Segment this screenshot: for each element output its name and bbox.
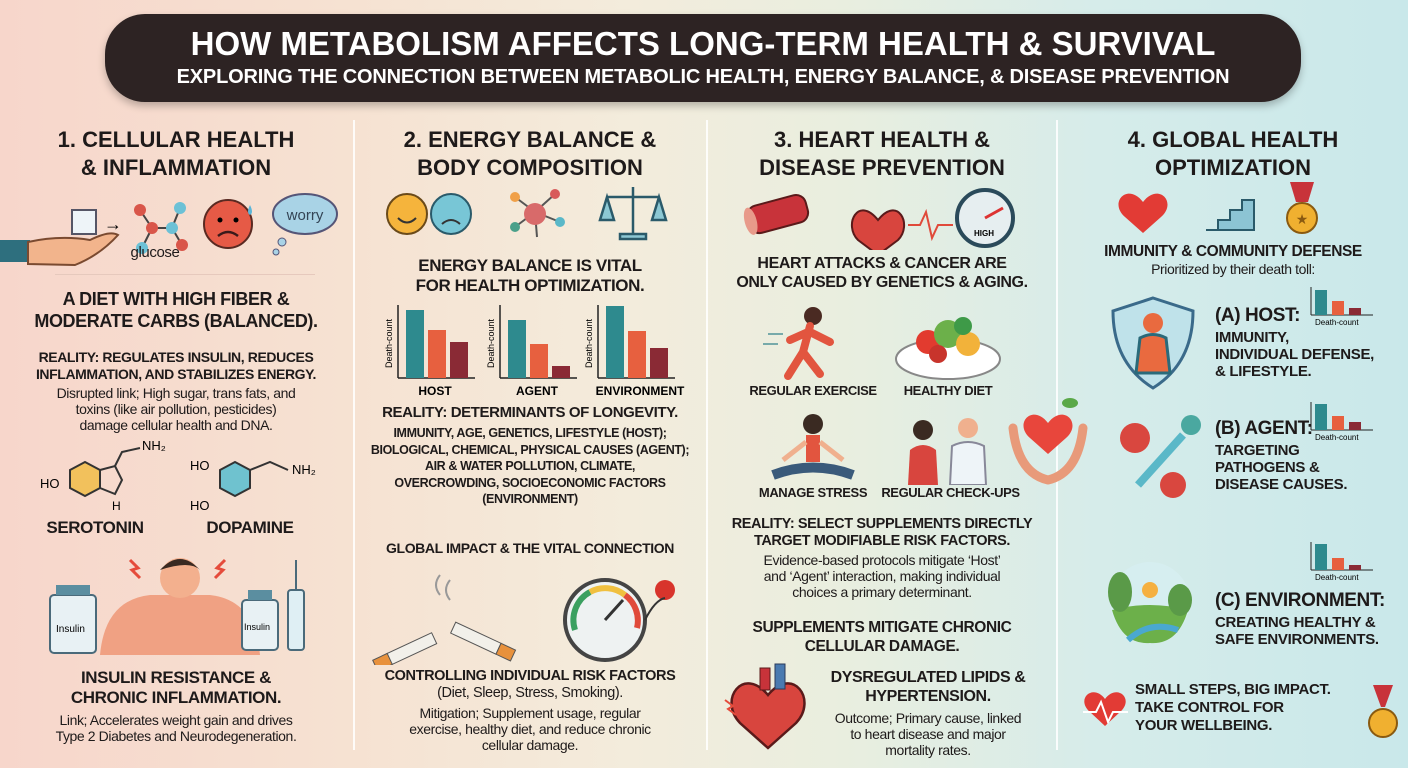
- molecules: HO: [40, 476, 60, 491]
- panel: heart health: [724, 127, 1088, 758]
- bar charts: ENVIRONMENT: [596, 384, 685, 398]
- item A: host: [1112, 287, 1374, 390]
- labels: serotonin dopamine: DOPAMINE: [206, 518, 294, 537]
- molecules: HO: [190, 458, 210, 473]
- molecules: [40, 440, 316, 513]
- link text: Link; Accelerates weight gain and drives: [59, 712, 293, 728]
- mitigation text: exercise, healthy diet, and reduce chronic: [409, 721, 651, 737]
- evidence text: choices a primary determinant.: [792, 584, 972, 600]
- reality: supplements: REALITY: SELECT SUPPLEMENTS DIRECTLY: [732, 516, 1032, 532]
- cigarette and gauge icons: [372, 574, 675, 665]
- item A: host: & LIFESTYLE.: [1215, 363, 1311, 380]
- icons row 4: [1118, 182, 1318, 234]
- heading 2: [404, 127, 656, 180]
- heading 2: BODY COMPOSITION: [417, 155, 643, 180]
- outcome text: mortality rates.: [885, 742, 971, 758]
- bar charts: Death-count: [384, 318, 394, 368]
- evidence text: [764, 552, 1000, 600]
- closing call to action: SMALL STEPS, BIG IMPACT.: [1135, 681, 1331, 698]
- insulin resistance heading: INSULIN RESISTANCE &: [81, 668, 271, 687]
- molecules: HO: [190, 498, 210, 513]
- reality: determinants: REALITY: DETERMINANTS OF LONGEVITY.: [382, 404, 678, 421]
- energy balance statement: ENERGY BALANCE IS VITAL: [418, 256, 642, 275]
- icons row 1: worry: [286, 207, 324, 224]
- immunity heading: IMMUNITY & COMMUNITY DEFENSE: [1104, 243, 1362, 260]
- bar charts: Death-count: [584, 318, 594, 368]
- item A: host: (A) HOST:: [1215, 305, 1300, 326]
- global impact heading: GLOBAL IMPACT & THE VITAL CONNECTION: [386, 540, 674, 556]
- myth statement: HEART ATTACKS & CANCER ARE: [757, 255, 1007, 272]
- labels: serotonin dopamine: [46, 518, 294, 537]
- closing call to action: TAKE CONTROL FOR: [1135, 699, 1284, 716]
- bar charts: HOST: [418, 384, 452, 398]
- item A: host: Death-count: [1315, 318, 1359, 327]
- heading 3: DISEASE PREVENTION: [759, 155, 1005, 180]
- reality text: INFLAMMATION, AND STABILIZES ENERGY.: [36, 366, 316, 382]
- icons row 1: [0, 193, 338, 266]
- supplements heading: [753, 619, 1012, 655]
- panel: energy balance: [371, 127, 689, 753]
- bar charts: Death-count: [486, 318, 496, 368]
- icons row 1: →: [104, 214, 122, 234]
- icon: healthy diet: [895, 317, 1001, 398]
- icon: regular exercise: [749, 307, 877, 398]
- labels: serotonin dopamine: SEROTONIN: [46, 518, 144, 537]
- heading 4: 4. GLOBAL HEALTH: [1128, 127, 1338, 152]
- item C: environment: Death-count: [1315, 573, 1359, 582]
- heading 4: [1128, 127, 1338, 180]
- outcome text: to heart disease and major: [850, 726, 1006, 742]
- item B: agent: Death-count: [1315, 433, 1359, 442]
- icon: manage stress: MANAGE STRESS: [759, 485, 867, 500]
- heading 4: OPTIMIZATION: [1155, 155, 1311, 180]
- prioritized text: Prioritized by their death toll:: [1151, 261, 1315, 277]
- label: glucose: glucose: [131, 244, 179, 261]
- icon: manage stress: [759, 414, 868, 500]
- lipids heading: [831, 669, 1026, 705]
- man and insulin vials: [49, 558, 305, 655]
- reality: supplements: [732, 516, 1032, 549]
- lipids heading: DYSREGULATED LIPIDS &: [831, 669, 1025, 686]
- supplements heading: SUPPLEMENTS MITIGATE CHRONIC: [753, 619, 1011, 636]
- man and insulin vials: Insulin: [244, 622, 270, 632]
- molecules: NH₂: [292, 462, 316, 477]
- determinants list: BIOLOGICAL, CHEMICAL, PHYSICAL CAUSES (AGENT);: [371, 442, 689, 456]
- energy balance statement: FOR HEALTH OPTIMIZATION.: [416, 276, 644, 295]
- controlling risk factors: CONTROLLING INDIVIDUAL RISK FACTORS: [385, 668, 675, 684]
- controlling risk factors: [385, 668, 676, 701]
- body text: [57, 385, 295, 433]
- icons row 3: [744, 188, 1015, 250]
- heading 1: [58, 127, 294, 180]
- heading 3: [759, 127, 1005, 180]
- heading 1: 1. CELLULAR HEALTH: [58, 127, 294, 152]
- title: HOW METABOLISM AFFECTS LONG-TERM HEALTH & SURVIVAL: [191, 25, 1215, 62]
- link text: Type 2 Diabetes and Neurodegeneration.: [56, 728, 296, 744]
- item B: agent: PATHOGENS &: [1215, 459, 1319, 476]
- determinants list: [371, 426, 689, 506]
- icons row 3: HIGH: [974, 229, 994, 238]
- insulin resistance heading: CHRONIC INFLAMMATION.: [71, 688, 281, 707]
- determinants list: OVERCROWDING, SOCIOECONOMIC FACTORS: [394, 476, 666, 490]
- man and insulin vials: Insulin: [56, 624, 85, 635]
- determinants list: AIR & WATER POLLUTION, CLIMATE,: [425, 459, 635, 473]
- link text: [56, 712, 296, 744]
- lipids heading: HYPERTENSION.: [865, 688, 991, 705]
- item A: host: IMMUNITY,: [1215, 329, 1289, 346]
- closing call to action: YOUR WELLBEING.: [1135, 717, 1272, 734]
- icons row 2: [386, 187, 668, 240]
- item B: agent: TARGETING: [1215, 442, 1300, 459]
- myth statement: [736, 255, 1028, 291]
- icon: healthy diet: HEALTHY DIET: [904, 383, 992, 398]
- diet heading: MODERATE CARBS (BALANCED).: [34, 311, 318, 331]
- myth statement: ONLY CAUSED BY GENETICS & AGING.: [736, 274, 1028, 291]
- body text: damage cellular health and DNA.: [79, 417, 273, 433]
- determinants list: (ENVIRONMENT): [482, 492, 578, 506]
- item C: environment: SAFE ENVIRONMENTS.: [1215, 631, 1379, 648]
- body text: Disrupted link; High sugar, trans fats, and: [57, 385, 295, 401]
- heading 3: 3. HEART HEALTH &: [774, 127, 990, 152]
- icon: regular check-ups: REGULAR CHECK-UPS: [881, 485, 1020, 500]
- icon: heart in hands: [1008, 398, 1088, 484]
- item C: environment: (C) ENVIRONMENT:: [1215, 590, 1385, 611]
- diet heading: A DIET WITH HIGH FIBER &: [63, 289, 289, 309]
- evidence text: and ‘Agent’ interaction, making individual: [764, 568, 1000, 584]
- reality: supplements: TARGET MODIFIABLE RISK FACTORS.: [754, 533, 1010, 549]
- energy balance statement: [416, 256, 644, 295]
- mitigation text: cellular damage.: [482, 737, 578, 753]
- determinants list: IMMUNITY, AGE, GENETICS, LIFESTYLE (HOST);: [393, 426, 667, 440]
- item B: agent: [1120, 402, 1373, 498]
- bar charts: AGENT: [516, 384, 559, 398]
- outcome text: Outcome; Primary cause, linked: [835, 710, 1021, 726]
- outcome text: [835, 710, 1021, 758]
- diet heading: [34, 289, 318, 331]
- heading 2: 2. ENERGY BALANCE &: [404, 127, 656, 152]
- icon: anatomical heart: [724, 664, 806, 750]
- reality text: [36, 349, 316, 382]
- body text: toxins (like air pollution, pesticides): [76, 401, 276, 417]
- subtitle: EXPLORING THE CONNECTION BETWEEN METABOLIC HEALTH, ENERGY BALANCE, & DISEASE PREVENTION: [177, 66, 1229, 88]
- panel: cellular health: [0, 127, 338, 744]
- item C: environment: CREATING HEALTHY &: [1215, 614, 1375, 631]
- heading 1: & INFLAMMATION: [81, 155, 271, 180]
- item A: host: INDIVIDUAL DEFENSE,: [1215, 346, 1374, 363]
- reality text: REALITY: REGULATES INSULIN, REDUCES: [39, 349, 313, 365]
- supplements heading: CELLULAR DAMAGE.: [805, 638, 959, 655]
- evidence text: Evidence-based protocols mitigate ‘Host’: [764, 552, 1000, 568]
- item C: environment: [1058, 540, 1408, 655]
- item B: agent: (B) AGENT:: [1215, 418, 1313, 439]
- mitigation text: [409, 705, 651, 753]
- insulin resistance heading: [71, 668, 281, 707]
- bar charts: [384, 305, 685, 398]
- mitigation text: Mitigation; Supplement usage, regular: [419, 705, 640, 721]
- title banner: [105, 14, 1301, 102]
- molecules: H: [112, 499, 121, 513]
- controlling risk factors: (Diet, Sleep, Stress, Smoking).: [437, 685, 623, 701]
- item B: agent: DISEASE CAUSES.: [1215, 476, 1347, 493]
- icon: regular check-ups: [881, 418, 1020, 500]
- closing call to action: [1073, 675, 1403, 750]
- icon: regular exercise: REGULAR EXERCISE: [749, 383, 877, 398]
- panel: global health: [1083, 127, 1398, 738]
- icons row 4: ★: [1296, 211, 1308, 227]
